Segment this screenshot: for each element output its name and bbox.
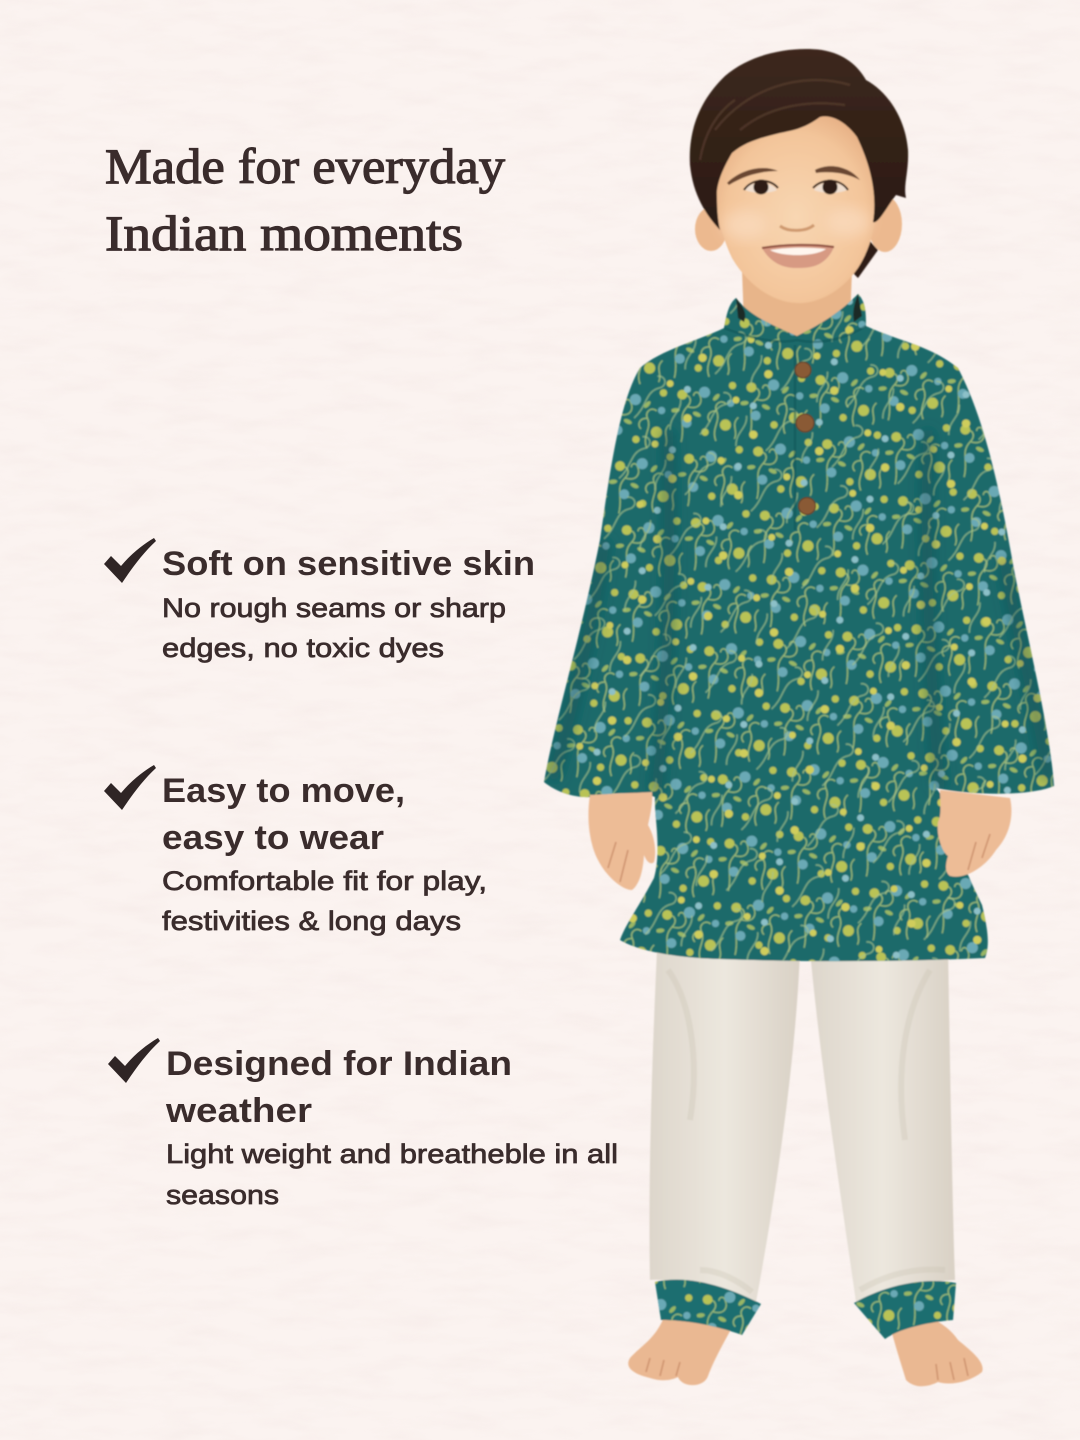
benefit description (162, 866, 487, 936)
kurta shading (552, 430, 1048, 795)
buttons (795, 362, 816, 514)
face (715, 112, 877, 303)
benefit description (162, 593, 506, 663)
pyjama cuffs (655, 1280, 956, 1339)
benefit: easy to move (104, 765, 487, 936)
benefit heading: Soft on sensitive skin (162, 545, 535, 583)
hair behind head (850, 230, 878, 278)
kurta seams (724, 326, 866, 530)
pyjama fold shadows (668, 970, 945, 1292)
benefit heading: Designed for Indian (166, 1045, 512, 1083)
benefit description (166, 1139, 618, 1210)
cheek glow (723, 207, 870, 240)
hair (690, 49, 908, 230)
ears (695, 196, 902, 252)
hands (588, 790, 1011, 890)
benefit description: Light weight and breatheble in all (166, 1139, 618, 1169)
title (105, 138, 505, 261)
icon: check mark (108, 1038, 160, 1083)
benefit description: No rough seams or sharp (162, 593, 506, 623)
illustration: smiling boy in kurta and pyjama (540, 49, 1060, 1386)
benefit heading: easy to wear (162, 819, 384, 857)
nose (780, 225, 814, 230)
benefit description: seasons (166, 1180, 279, 1210)
feet (628, 1300, 983, 1386)
benefit heading: Easy to move, (162, 772, 405, 810)
collar opening (736, 298, 745, 322)
eyes and brows (727, 166, 860, 194)
benefit description: festivities & long days (162, 906, 461, 936)
title: Made for everyday (105, 138, 505, 194)
benefit description: edges, no toxic dyes (162, 633, 444, 663)
title: Indian moments (105, 205, 463, 261)
benefit description: Comfortable fit for play, (162, 866, 487, 896)
hair highlights (700, 80, 850, 160)
benefit: designed for Indian weather (108, 1038, 618, 1210)
kurta (540, 290, 1060, 970)
icon: check mark (104, 538, 156, 583)
benefit heading (165, 1045, 512, 1130)
smile (762, 245, 834, 268)
benefit heading (162, 772, 405, 857)
benefit heading: weather (165, 1092, 312, 1130)
benefit: soft on sensitive skin (104, 538, 535, 663)
icon: check mark (104, 765, 156, 810)
neck (742, 270, 852, 340)
pyjama (649, 950, 955, 1302)
